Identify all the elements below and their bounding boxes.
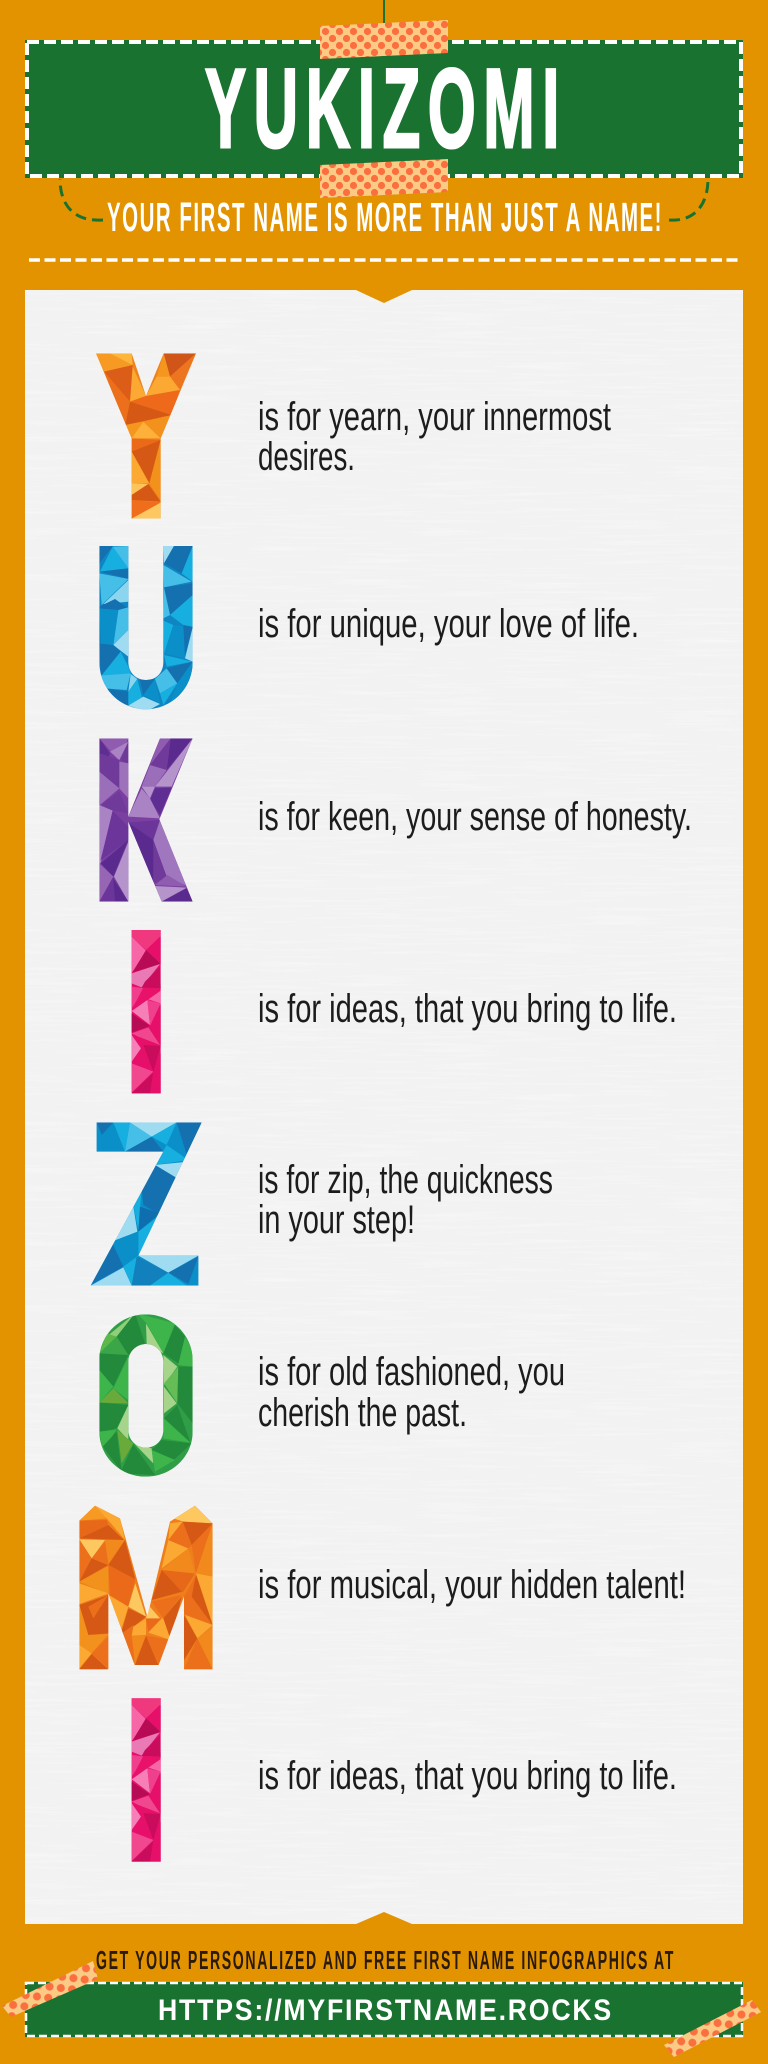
- text: U: is for unique, your love of life.: [258, 602, 639, 646]
- connector: right curve: [669, 179, 708, 220]
- text: Y: [258, 395, 611, 479]
- text: Z: in your step!: [258, 1198, 415, 1242]
- text: O: cherish the past.: [258, 1391, 467, 1435]
- tape: bottom of banner: [320, 159, 448, 198]
- letter I (last): [132, 1698, 161, 1862]
- panel: letters: [25, 290, 743, 1924]
- letter Z: [90, 1120, 203, 1287]
- text: Z: [258, 1158, 553, 1242]
- hanging line: [383, 0, 385, 26]
- tape: footer right: [664, 2000, 761, 2057]
- header banner: [25, 40, 743, 178]
- letter U: [97, 543, 197, 713]
- letter I: [132, 930, 161, 1093]
- text: Z: is for zip, the quickness: [258, 1158, 553, 1202]
- tape: footer left: [2, 1961, 98, 2017]
- letter M: [77, 1503, 215, 1672]
- letter Y: [93, 350, 200, 520]
- text: O: [258, 1350, 565, 1435]
- footer banner: [25, 1982, 743, 2037]
- text: Y: is for yearn, your innermost: [258, 395, 611, 439]
- connector: left curve: [60, 179, 103, 220]
- text: Y: desires.: [258, 435, 355, 479]
- tape: top: [320, 20, 448, 59]
- footer url: HTTPS://MYFIRSTNAME.ROCKS: [158, 1994, 613, 2027]
- letter O: [97, 1312, 197, 1478]
- text: O: is for old fashioned, you: [258, 1350, 565, 1394]
- letter K: [97, 737, 197, 903]
- dashed divider: [29, 258, 739, 262]
